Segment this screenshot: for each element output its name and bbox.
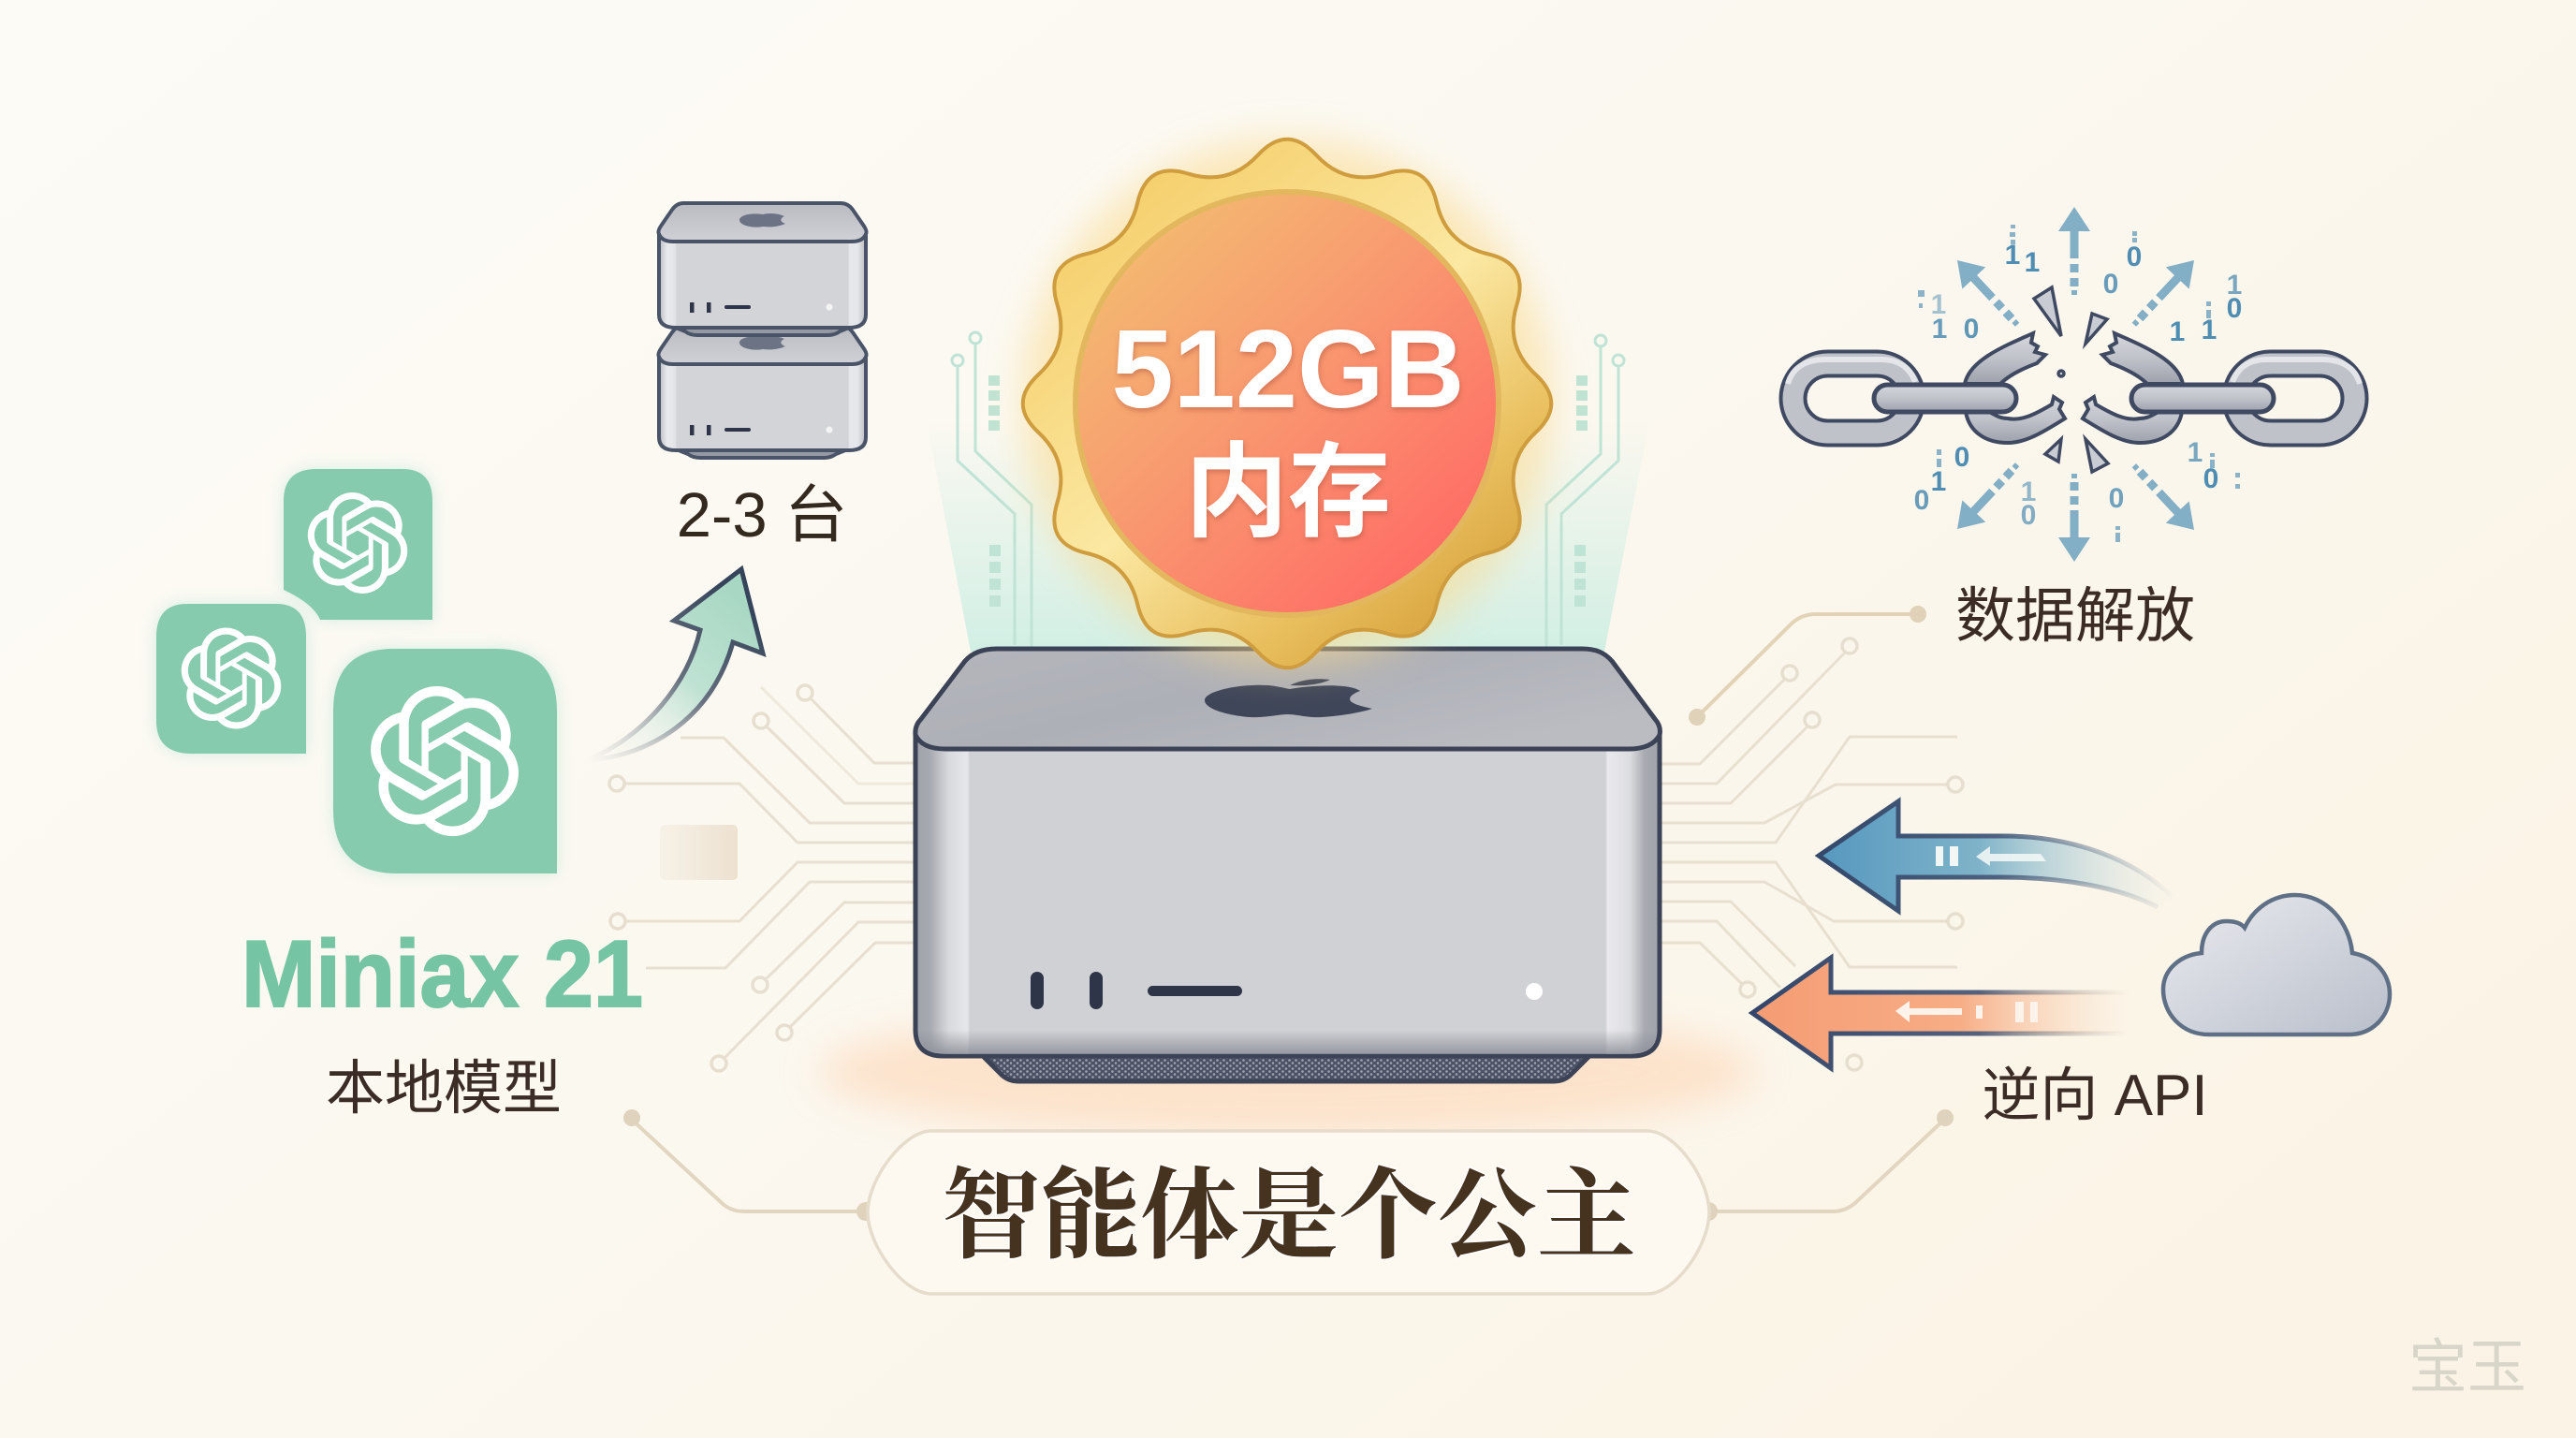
badge figure: 512GB xyxy=(1111,307,1465,432)
orange inbound arrow xyxy=(1752,958,2130,1068)
orange glow below the computer xyxy=(819,1006,1755,1137)
left chain half xyxy=(1788,333,2065,443)
badge label: 内存 xyxy=(1185,435,1391,550)
label: 2-3 units: 2-3 台 xyxy=(677,480,847,550)
binary digits: 1 xyxy=(2005,240,2020,271)
stacked computers xyxy=(658,203,867,458)
vent foot xyxy=(981,1054,1591,1081)
connector: API to pill xyxy=(1699,1109,1954,1221)
tile: top xyxy=(284,469,432,620)
pill outline xyxy=(868,1131,1709,1294)
binary digits: 1 xyxy=(2025,247,2040,278)
coral disc xyxy=(1076,192,1499,615)
connector: local model to pill xyxy=(623,1109,875,1221)
lower unit xyxy=(658,326,867,458)
binary digits: 0 xyxy=(2203,463,2218,494)
curved growth arrow xyxy=(588,569,763,760)
light beam behind the badge xyxy=(927,421,1649,652)
binary digits: 0 xyxy=(1964,314,1979,345)
binary digits: 1 xyxy=(1932,314,1947,345)
metal shards xyxy=(2034,287,2108,472)
tile: large xyxy=(333,649,557,873)
ports xyxy=(1031,972,1242,1009)
label: data liberation: 数据解放 xyxy=(1955,582,2195,650)
apple logo xyxy=(1205,679,1372,717)
binary digits: 1 xyxy=(1931,466,1946,497)
binary digits: 1 xyxy=(1931,289,1946,320)
cloud icon xyxy=(2163,895,2390,1034)
binary digits: 0 xyxy=(2109,483,2124,514)
binary digits: 0 xyxy=(1914,485,1929,516)
burst arrows xyxy=(1946,207,2205,562)
circuit traces: right xyxy=(1661,638,1963,1070)
main computer xyxy=(915,649,1660,1081)
upper unit xyxy=(658,203,867,335)
binary digits: 0 xyxy=(2103,269,2118,300)
scalloped gold edge xyxy=(1023,139,1551,668)
status light xyxy=(1526,983,1543,1000)
blue inbound arrow xyxy=(1819,801,2173,911)
model name: Miniax 21 xyxy=(242,922,643,1027)
binary digits: 1 xyxy=(2202,315,2217,345)
broken chain icon xyxy=(1788,287,2360,472)
right chain half xyxy=(2083,333,2360,443)
badge glow xyxy=(1023,139,1551,668)
top face xyxy=(915,649,1660,749)
watermark: 宝玉 xyxy=(2408,1335,2526,1401)
binary digits: 1 xyxy=(2227,270,2242,301)
binary digits: 1 xyxy=(2170,316,2185,347)
binary digits: 1 xyxy=(2188,437,2203,468)
circuit traces: left xyxy=(609,685,914,1071)
transfer marks xyxy=(1936,846,2046,866)
transfer marks xyxy=(1895,1001,2038,1022)
faded chip block xyxy=(660,825,738,880)
label: local model: 本地模型 xyxy=(326,1056,562,1122)
binary digits: 0 xyxy=(1954,442,1969,473)
title text: 智能体是个公主 xyxy=(942,1162,1636,1271)
front body xyxy=(915,735,1660,1056)
binary digits: 0 xyxy=(2127,242,2142,272)
bottom edge shading xyxy=(918,1030,1657,1053)
label: reverse API: 逆向 API xyxy=(1982,1064,2208,1128)
icon group: model tiles xyxy=(156,469,557,873)
memory badge xyxy=(1023,139,1551,668)
binary digits: 0 xyxy=(2227,293,2242,324)
binary digits: 1 xyxy=(2021,477,2036,507)
tile: left xyxy=(156,604,306,754)
connector: data liberation xyxy=(1689,606,1926,726)
beam circuit traces: left xyxy=(952,332,1032,652)
title pill xyxy=(868,1131,1709,1294)
beam circuit traces: right xyxy=(1546,335,1624,652)
binary digits: 0 xyxy=(2021,500,2036,531)
binary digits xyxy=(1914,225,2242,542)
